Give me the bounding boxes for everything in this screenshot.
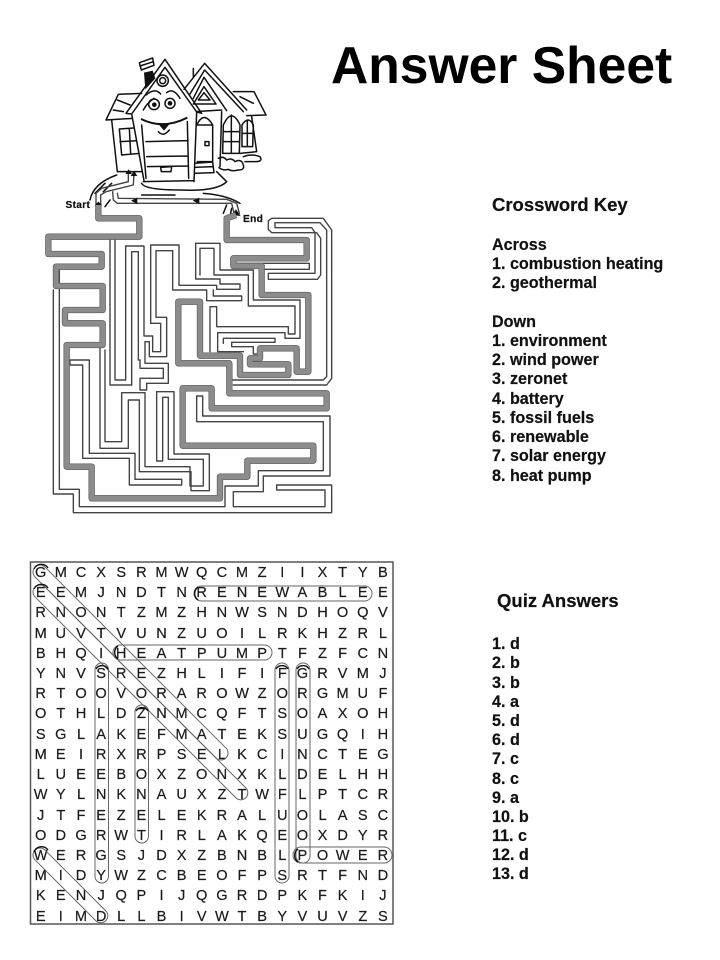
word search letters: BHQIHEATPUMPTFZFCN (36, 646, 388, 662)
text block: quiz answers (492, 590, 619, 883)
label: Start: Start (66, 200, 91, 211)
quiz answer list: 11. c (492, 827, 527, 845)
quiz answer list: 2. b (492, 654, 520, 672)
icon: pipe lines (96, 173, 239, 213)
icon: arched window (223, 115, 253, 153)
word search letters: MUVTVUNZUOILRKHZRL (35, 626, 387, 642)
icon: chimney (144, 71, 155, 89)
across answers: Across (492, 236, 547, 254)
icon: window left (119, 128, 140, 155)
maze walls (53, 218, 332, 513)
icon: pipe arrows (95, 169, 241, 216)
quiz answer list: 10. b (492, 808, 529, 826)
down answers: 1. environment (492, 332, 607, 350)
word search letters: WERGSJDXZBNBLPOWER (34, 848, 388, 864)
word search letters: MEIRXRPSELKCINCTEG (35, 747, 389, 763)
quiz answer list: 1. d (492, 635, 520, 653)
word search letters: RTOOVORAROWZORGMUF (35, 686, 387, 702)
word search letters: OTHLDZNMCQFTSOAXOH (35, 706, 388, 722)
down answers: 4. battery (492, 390, 564, 408)
quiz answer list: 8. c (492, 770, 519, 788)
word loops (30, 562, 392, 926)
icon: front door (193, 117, 214, 173)
down answers: 2. wind power (492, 351, 599, 369)
down answers (492, 313, 607, 485)
title: Answer Sheet (331, 36, 672, 94)
icon: bushes (218, 155, 261, 171)
quiz answer list (492, 635, 529, 883)
quiz answer list: 13. d (492, 865, 529, 883)
quiz answer list: 7. c (492, 750, 519, 768)
down answers: 8. heat pump (492, 467, 592, 485)
word search letters: JTFEZELEKRALUOLASC (37, 808, 388, 824)
quiz answer list: 5. d (492, 712, 520, 730)
across answers: 1. combustion heating (492, 255, 663, 273)
word search border (30, 562, 393, 924)
label: End: End (243, 214, 263, 225)
text block: crossword key (492, 194, 663, 485)
word search letters: ODGRWTIRLAKQEOXDYR (35, 828, 388, 844)
word search letters: KENJQPIJQGRDPKFKIJ (36, 888, 387, 904)
down answers: 7. solar energy (492, 447, 606, 465)
word search letters: YNVSREZHLIFIFGRVMJ (36, 666, 387, 682)
down answers: 6. renewable (492, 428, 589, 446)
word search letters: LUEEBOXZONXKLDELHH (37, 767, 388, 783)
word search letters: EIMDLLBIVWTBYVUVZS (36, 909, 388, 925)
icon: lawn (90, 172, 240, 217)
heading: crossword key: Crossword Key (492, 194, 628, 215)
word search letters: EEMJNDTNRENEWABLEE (36, 585, 388, 601)
quiz answer list: 4. a (492, 693, 520, 711)
word search letters: RNONTZMZHNWSNDHOQV (35, 605, 388, 621)
quiz answer list: 9. a (492, 789, 520, 807)
quiz answer list: 3. b (492, 674, 520, 692)
maze solution path (48, 205, 327, 498)
quiz answer list: 12. d (492, 846, 529, 864)
down answers: 3. zeronet (492, 370, 568, 388)
icon: smiling house (90, 58, 266, 217)
word search letters: GMCXSRMWQCMZIIXTYB (35, 565, 388, 581)
word search letters: SGLAKEFMATEKSUGQIH (36, 727, 388, 743)
across answers: 2. geothermal (492, 274, 597, 292)
across answers (492, 236, 663, 292)
word search letters: WYLNKNAUXZTWFLPTCR (34, 787, 388, 803)
maze (48, 205, 332, 513)
down answers: Down (492, 313, 536, 331)
heading: quiz answers: Quiz Answers (497, 590, 619, 611)
word search (30, 562, 393, 926)
word search letters: MIDYWZCBEOFPSRTFND (35, 868, 388, 884)
down answers: 5. fossil fuels (492, 409, 594, 427)
icon: right gable (184, 63, 247, 167)
word search letters (34, 565, 389, 925)
icon: house face (126, 59, 202, 182)
quiz answer list: 6. d (492, 731, 520, 749)
